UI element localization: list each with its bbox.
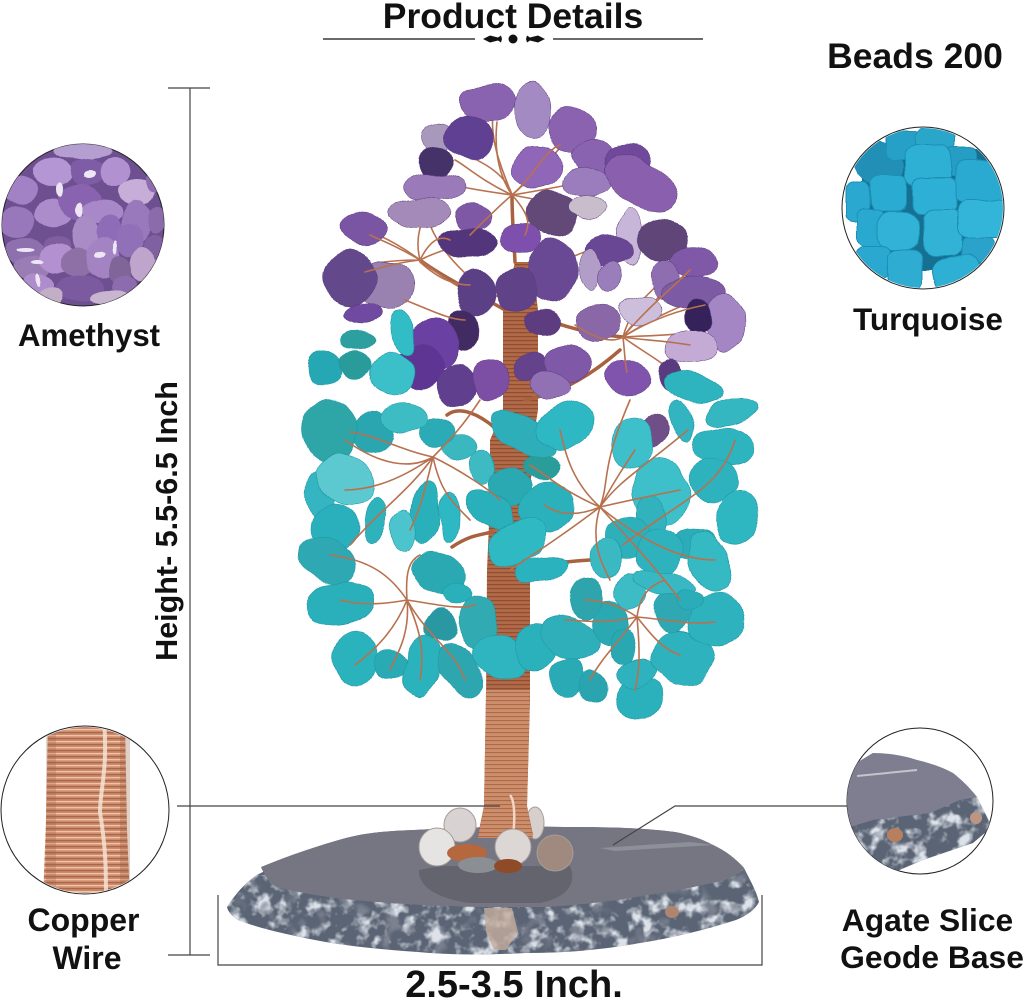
copper reference line [177,805,500,807]
main branches [420,195,623,563]
amethyst wires [365,122,705,372]
amethyst label: Amethyst [18,318,160,353]
height label: Height- 5.5-6.5 Inch [150,381,184,661]
copper wire label: Copper [28,902,140,938]
agate base [227,807,759,954]
crystal chips at trunk foot [419,807,573,871]
height dimension line [168,88,210,955]
amethyst beads [323,82,745,448]
trunk [478,262,538,835]
turquoise beads [291,308,766,719]
agate reference line [613,806,847,845]
copper wire label: Wire [52,940,122,976]
inset: turquoise [842,127,1010,294]
beads count: Beads 200 [827,36,1003,76]
turquoise label: Turquoise [853,301,1003,337]
fine branches [355,112,725,372]
inset: amethyst [0,141,167,306]
tree [291,82,766,873]
trunk foot [447,829,531,873]
front wires [330,400,735,690]
title divider [323,34,703,44]
inset: copper wire [1,720,169,900]
agate label: Geode Base [840,939,1024,975]
width bracket [218,895,762,965]
inset: agate base [845,728,993,877]
agate label: Agate Slice [842,902,1013,938]
